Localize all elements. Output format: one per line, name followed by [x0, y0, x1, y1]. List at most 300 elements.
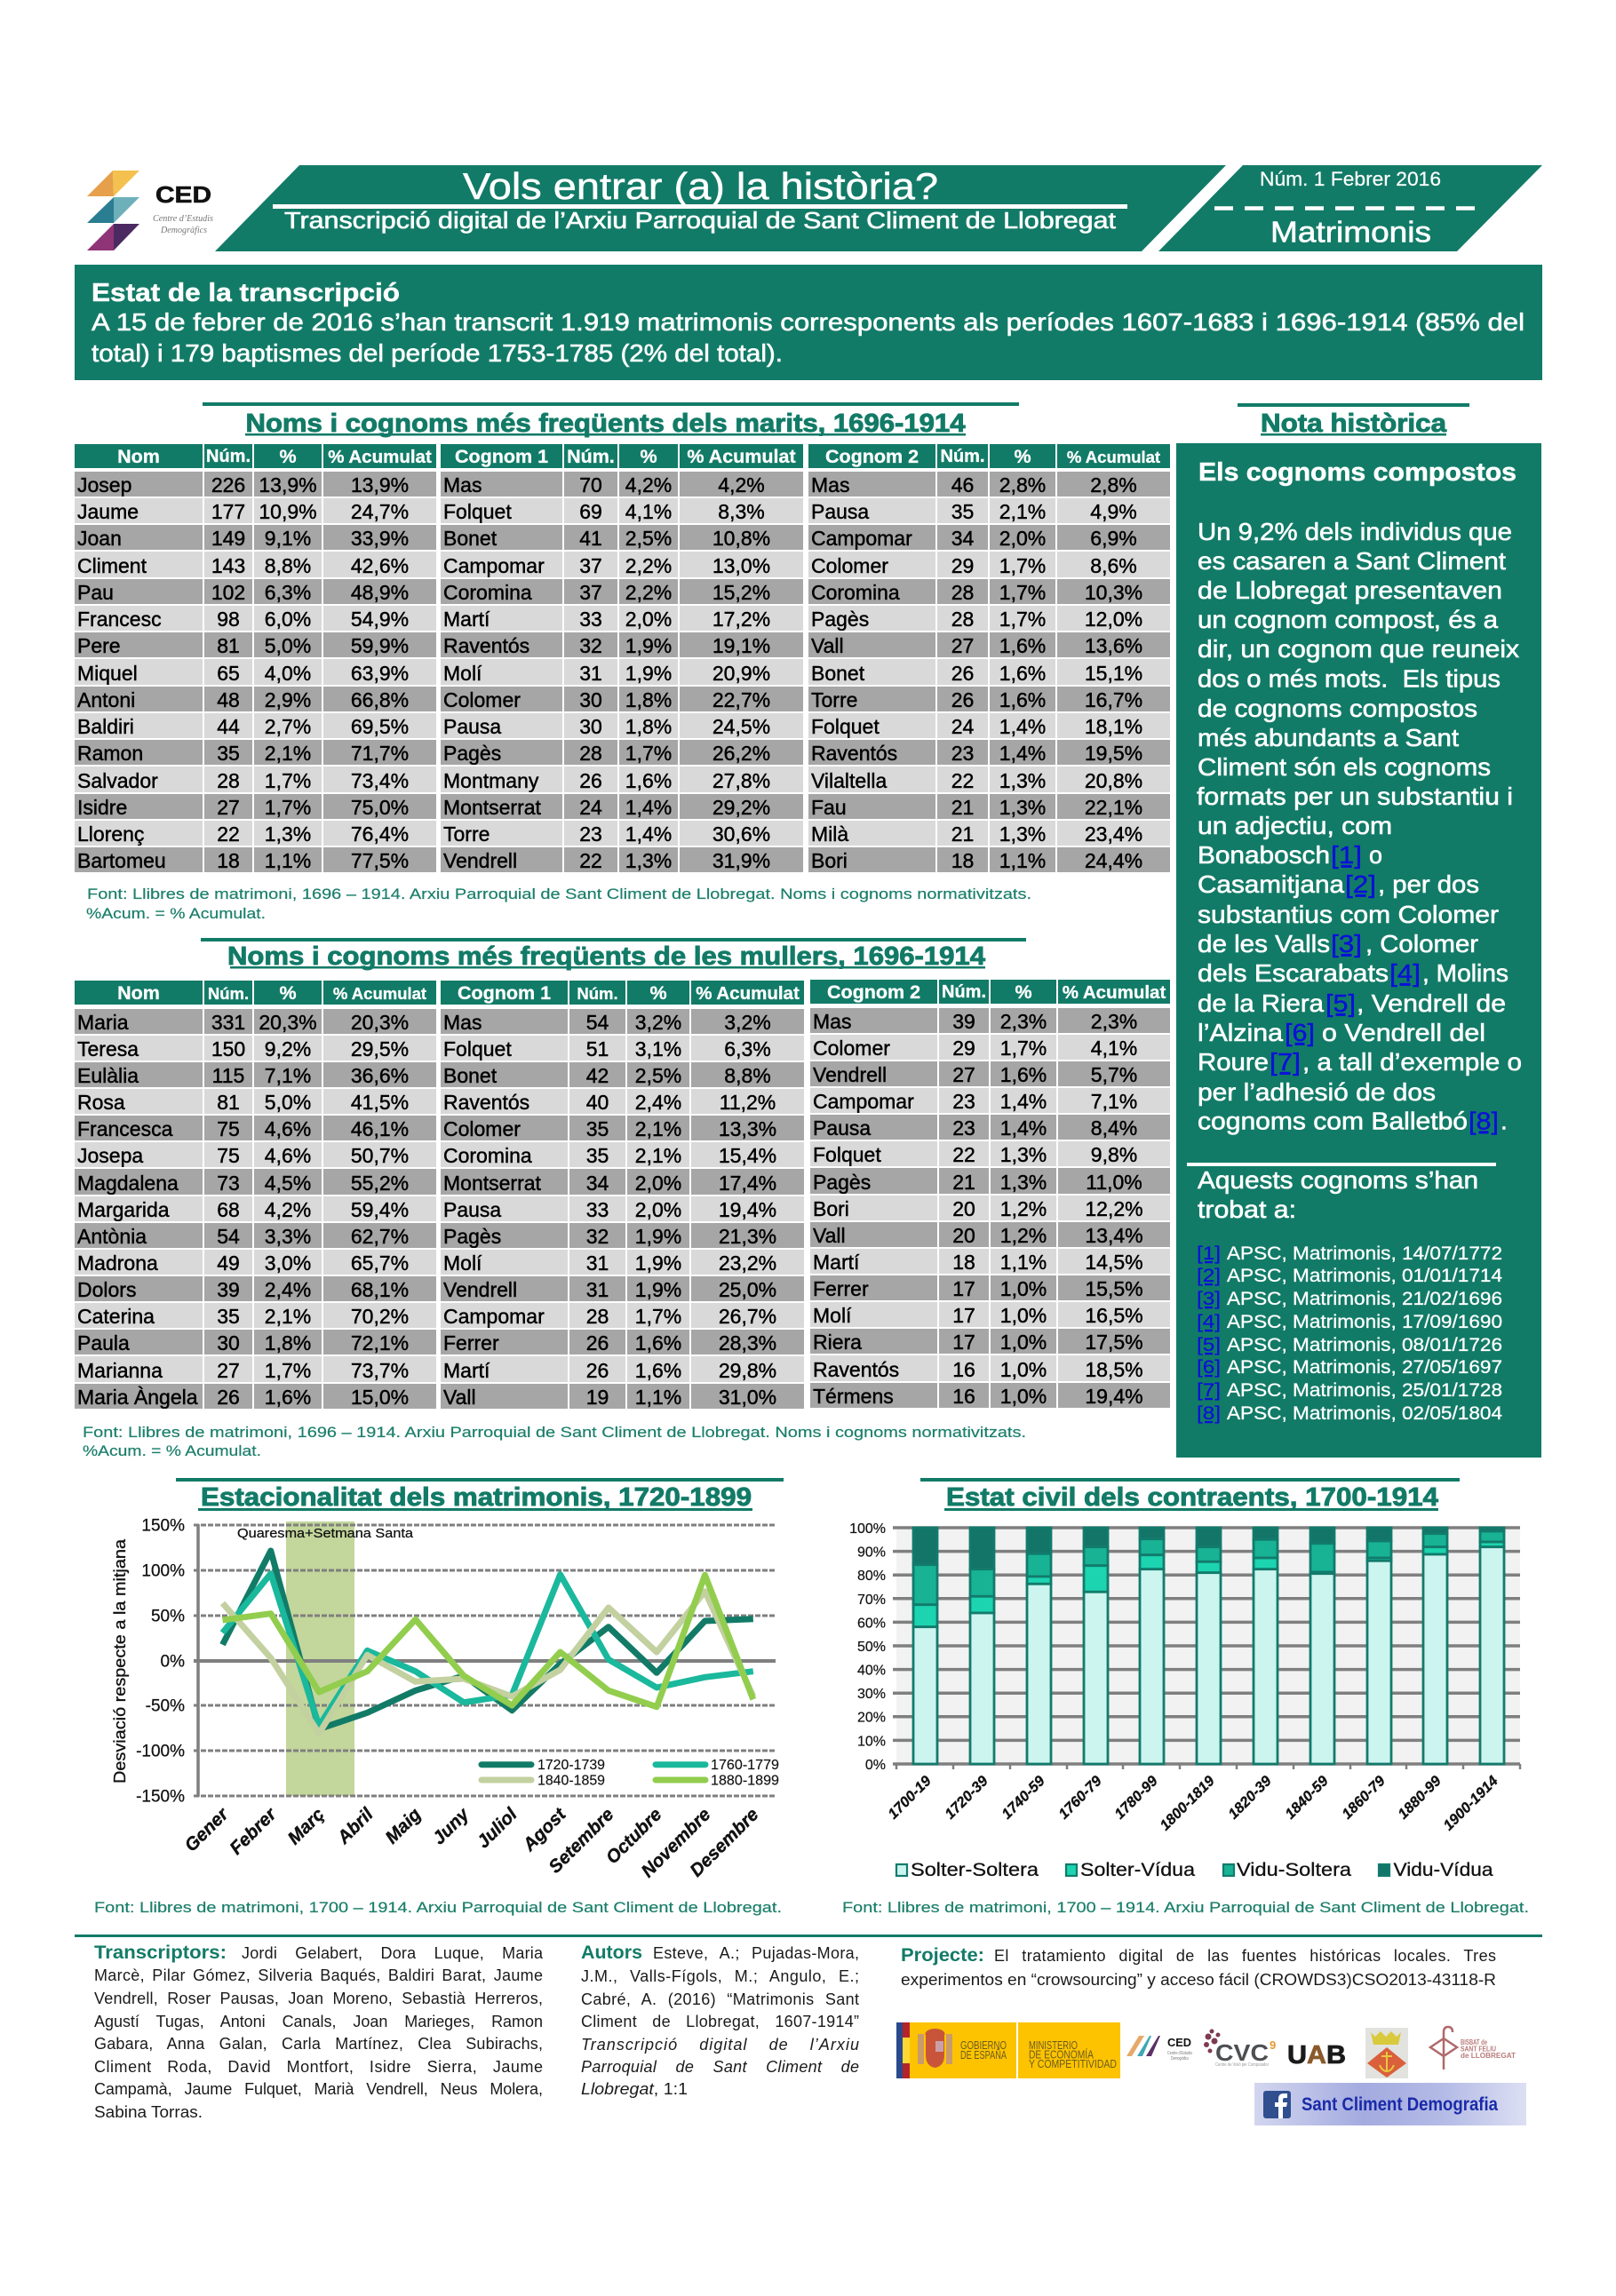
- table: cognom 2 marits: 46: [951, 473, 974, 497]
- period labels: 1800-1819: [1157, 1773, 1218, 1834]
- table: noms mullers: 26: [217, 1386, 240, 1409]
- table: cognom 1 mullers: 32: [586, 1225, 609, 1248]
- references list: [8]: [1197, 1403, 1221, 1424]
- table: cognom 2 marits: 16,7%: [1085, 688, 1142, 711]
- title banner: [215, 165, 1226, 251]
- table: noms mullers: 73: [217, 1171, 240, 1194]
- table: cognom 1 mullers: 21,3%: [719, 1225, 776, 1248]
- table: noms mullers: 9,2%: [265, 1037, 311, 1061]
- table: cognom 2 marits: 34: [951, 527, 974, 550]
- table: noms marits: 5,0%: [265, 634, 311, 657]
- table: cognom 1 marits: 4,2%: [625, 473, 672, 497]
- footer: transcriptors: Climent Roda, David Montfort, Isidre Sierra, Jaume: [94, 2058, 543, 2076]
- period labels: 1760-79: [1055, 1773, 1105, 1823]
- table: cognom 2 marits: 28: [951, 581, 974, 604]
- note body text: , a tall d’exemple o: [1302, 1048, 1522, 1076]
- table: cognom 1 mullers: 28,3%: [719, 1331, 776, 1355]
- table: noms mullers: 36,6%: [351, 1064, 409, 1087]
- table: cognom 1 mullers: 8,8%: [724, 1064, 771, 1087]
- table: cognom 2 marits: 23: [951, 742, 974, 765]
- table: noms marits: 54,9%: [351, 608, 409, 631]
- table: cognom 1 marits: 30: [579, 715, 602, 738]
- table: cognom 1 marits: Coromina: [443, 581, 532, 604]
- table: cognom 2 mullers: 14,5%: [1085, 1251, 1143, 1274]
- table: noms mullers: 39: [217, 1278, 240, 1301]
- table: cognom 2 mullers: Pausa: [813, 1116, 871, 1140]
- table: cognom 1 mullers: 1,1%: [635, 1386, 681, 1409]
- footer: autors: J.M., Valls-Fígols, M.; Angulo, E.;: [581, 1967, 859, 1985]
- table: noms mullers: Caterina: [77, 1305, 155, 1328]
- table: cognom 1 marits: 24: [579, 796, 602, 819]
- table: noms marits: 226: [211, 473, 245, 497]
- table: noms marits: Núm.: [206, 447, 251, 466]
- table: cognom 1 marits: 30: [579, 688, 602, 711]
- table: cognom 1 mullers: 2,0%: [635, 1171, 681, 1194]
- logo: bisbat: BISBAT de: [1461, 2038, 1487, 2046]
- table: noms marits: 76,4%: [351, 822, 409, 846]
- references list: [4]: [1197, 1312, 1221, 1332]
- note body text: Climent són els cognoms: [1198, 753, 1491, 781]
- table: noms marits: 75,0%: [351, 796, 409, 819]
- table: noms marits: Pere: [77, 634, 121, 657]
- table: cognom 1 mullers: 13,3%: [719, 1117, 776, 1140]
- table: noms marits: 42,6%: [351, 554, 409, 577]
- logo: gobierno de españa: DE ECONOMÍA: [1029, 2048, 1095, 2061]
- logo: CED small: [1126, 2036, 1192, 2062]
- month labels: Juliol: [473, 1803, 521, 1852]
- table: cognom 1 marits: Bonet: [443, 527, 497, 550]
- period labels: 1780-99: [1111, 1773, 1161, 1823]
- table: cognom 2 mullers: 1,2%: [1000, 1224, 1047, 1247]
- stacked bar chart: estat civil: [849, 1521, 1520, 1880]
- table: cognom 2 marits: 2,8%: [999, 473, 1046, 497]
- table: cognom 1 mullers: 2,0%: [635, 1198, 681, 1221]
- table: noms marits: 98: [217, 608, 240, 631]
- table: cognom 1 mullers: 25,0%: [719, 1278, 776, 1301]
- table: cognom 1 mullers: Mas: [443, 1011, 482, 1034]
- table: cognom 2 marits: Vilaltella: [811, 769, 887, 792]
- table: noms marits: 6,0%: [265, 608, 311, 631]
- table: cognom 1 marits: 28: [579, 742, 602, 765]
- note body text: .: [1501, 1107, 1508, 1135]
- table: cognom 1 mullers: 42: [586, 1064, 609, 1087]
- table: cognom 1 marits: 2,0%: [625, 608, 672, 631]
- table: cognom 2 marits: 19,5%: [1085, 742, 1142, 765]
- y axis labels: 50%: [857, 1640, 886, 1655]
- period labels: 1860-79: [1339, 1773, 1389, 1823]
- table: cognom 2 mullers: 1,7%: [1000, 1037, 1047, 1060]
- issue number: Núm. 1 Febrer 2016: [1260, 168, 1441, 190]
- references list: APSC, Matrimonis, 01/01/1714: [1227, 1266, 1502, 1286]
- table: cognom 2 marits: 15,1%: [1085, 661, 1142, 684]
- table: cognom 2 mullers: 8,4%: [1091, 1116, 1137, 1140]
- table: cognom 1 marits: 29,2%: [712, 796, 770, 819]
- references list: APSC, Matrimonis, 17/09/1690: [1227, 1312, 1502, 1332]
- facebook badge: [1254, 2083, 1526, 2125]
- table: cognom 1 mullers: Pausa: [443, 1198, 501, 1221]
- table: noms mullers: Margarida: [77, 1198, 170, 1221]
- table: cognom 1 mullers: Martí: [443, 1359, 490, 1382]
- table: noms marits: Baldiri: [77, 715, 134, 738]
- table: noms marits: Jaume: [77, 500, 139, 523]
- table: cognom 2 mullers: 21: [952, 1171, 975, 1194]
- table: cognom 2 mullers: 19,4%: [1085, 1385, 1143, 1408]
- table: noms marits: 24,7%: [351, 500, 409, 523]
- table: cognom 2 marits: Bonet: [811, 661, 864, 684]
- table: cognom 1 mullers: 2,4%: [635, 1091, 681, 1114]
- note body text: [4]: [1389, 959, 1421, 987]
- note body text: Un 9,2% dels individus que: [1198, 518, 1512, 545]
- table: cognom 1 marits: % Acumulat: [687, 446, 796, 467]
- subtitle: Transcripció digital de l’Arxiu Parroquial de Sant Climent de Llobregat: [284, 209, 1116, 234]
- table: cognom 1 mullers: Molí: [443, 1251, 482, 1275]
- table: noms marits: 13,9%: [259, 473, 317, 497]
- table: noms marits: 48,9%: [351, 581, 409, 604]
- table: noms mullers: 4,2%: [265, 1198, 311, 1221]
- references list: APSC, Matrimonis, 08/01/1726: [1227, 1335, 1502, 1355]
- table: cognom 1 mullers: Cognom 1: [458, 982, 551, 1004]
- table: cognom 2 marits: 21: [951, 822, 974, 846]
- table: noms mullers: Francesca: [77, 1117, 172, 1140]
- month labels: Maig: [381, 1804, 426, 1848]
- table: cognom 1 mullers: %: [649, 982, 667, 1004]
- table: cognom 1 marits: 31: [579, 661, 602, 684]
- table: cognom 2 marits: 12,0%: [1085, 608, 1142, 631]
- table: cognom 2 mullers: Pagès: [813, 1171, 871, 1194]
- table: cognom 1 marits: 69: [579, 500, 602, 523]
- y axis labels: 20%: [857, 1711, 886, 1725]
- table: cognom 2 marits: Cognom 2: [825, 446, 919, 467]
- table: cognom 2 mullers: 1,4%: [1000, 1090, 1047, 1113]
- table: cognom 2 mullers: 18: [952, 1251, 975, 1274]
- source: taula marits: %Acum. = % Acumulat.: [86, 905, 266, 922]
- month labels: Abril: [333, 1803, 378, 1848]
- table: noms marits: Pau: [77, 581, 114, 604]
- panel text: [92, 308, 1524, 367]
- table: cognom 2 mullers: 22: [952, 1143, 975, 1166]
- y axis labels: 90%: [857, 1545, 886, 1560]
- table: noms marits: 9,1%: [265, 527, 311, 550]
- table: noms mullers: 50,7%: [351, 1144, 409, 1167]
- table: noms marits: 1,3%: [265, 822, 311, 846]
- table: cognom 1 marits: Campomar: [443, 554, 545, 577]
- table: cognom 1 mullers: Folquet: [443, 1037, 512, 1061]
- table: cognom 1 marits: 17,2%: [712, 608, 770, 631]
- source: taula mullers: %Acum. = % Acumulat.: [83, 1442, 261, 1459]
- table: cognom 1 marits: Raventós: [443, 634, 529, 657]
- logo: bisbat: SANT FELIU: [1461, 2045, 1496, 2054]
- table: noms marits: 1,7%: [265, 769, 311, 792]
- table: cognom 2 marits: 1,7%: [999, 608, 1046, 631]
- table: cognom 2 marits: 1,7%: [999, 581, 1046, 604]
- table: cognom 1 mullers: 3,2%: [724, 1011, 771, 1034]
- band label: Quaresma+Setmana Santa: [237, 1526, 414, 1541]
- table: cognom 1 marits: 19,1%: [712, 634, 770, 657]
- note body text: dels Escarabats: [1198, 959, 1389, 987]
- heading: noms marits: Noms i cognoms més freqüents dels marits, 1696-1914: [245, 409, 965, 438]
- table: noms mullers: 15,0%: [351, 1386, 409, 1409]
- table: cognom 1 mullers: Pagès: [443, 1225, 501, 1248]
- period labels: 1720-39: [942, 1773, 991, 1823]
- footer: autors: Llobregat , 1:1: [581, 2080, 688, 2098]
- table: noms marits: 66,8%: [351, 688, 409, 711]
- source: taula mullers: Font: Llibres de matrimoni, 1696 – 1914. Arxiu Parroquial de Sant Climent de Llobregat. Noms i cognoms normativitzats.: [83, 1424, 1026, 1441]
- table: cognom 2 marits: 24: [951, 715, 974, 738]
- note body text: de Llobregat presentaven: [1198, 576, 1502, 604]
- table: cognom 2 mullers: Molí: [813, 1304, 851, 1327]
- table: noms marits: %: [279, 446, 297, 467]
- table: noms mullers: 73,7%: [351, 1359, 409, 1382]
- table: cognom 2 mullers: Cognom 2: [827, 981, 920, 1003]
- table: noms marits: Isidre: [77, 796, 127, 819]
- table: noms mullers: 75: [217, 1117, 240, 1140]
- note body text: , per dos: [1378, 870, 1479, 898]
- footer: autors: Autors: [581, 1942, 642, 1963]
- table: cognom 1 marits: Montserrat: [443, 796, 541, 819]
- note body text: substantius com Colomer: [1198, 901, 1499, 928]
- table: cognom 2 mullers: Raventós: [813, 1357, 899, 1380]
- table: noms marits: % Acumulat: [328, 446, 432, 467]
- table: noms marits: 177: [211, 500, 245, 523]
- table: noms mullers: Nom: [117, 982, 160, 1004]
- period labels: 1840-59: [1282, 1773, 1332, 1823]
- table: cognom 2 marits: 1,1%: [999, 849, 1046, 872]
- references list: APSC, Matrimonis, 25/01/1728: [1227, 1380, 1502, 1401]
- table: cognom 2 mullers: Riera: [813, 1331, 862, 1354]
- logo: CVC: CVC: [1215, 2039, 1269, 2066]
- table: cognom 1 marits: 41: [579, 527, 602, 550]
- table: cognom 2 marits: 1,6%: [999, 634, 1046, 657]
- table: cognom 2 marits: Vall: [811, 634, 844, 657]
- table: noms mullers: %: [279, 982, 297, 1004]
- table: cognom 2 marits: Núm.: [940, 447, 984, 466]
- table: noms mullers: Madrona: [77, 1251, 158, 1275]
- table: noms marits: 149: [211, 527, 245, 550]
- y axis labels: -50%: [146, 1696, 185, 1716]
- table: cognom 2 mullers: Vall: [813, 1224, 846, 1247]
- table: cognom 2 marits: Bori: [811, 849, 848, 872]
- y axis labels: 50%: [151, 1608, 185, 1625]
- footer: transcriptors: Sabina Torras.: [94, 2103, 203, 2121]
- table: cognom 2 marits: 20,8%: [1085, 769, 1142, 792]
- table: cognom 2 mullers: 1,0%: [1000, 1385, 1047, 1408]
- table: noms marits: 22: [217, 822, 240, 846]
- note body text: formats per un substantiu i: [1197, 783, 1513, 810]
- logo: CED small: CED: [1167, 2036, 1191, 2049]
- table: noms mullers: 115: [212, 1064, 244, 1087]
- table: cognom 2 marits: 18,1%: [1085, 715, 1142, 738]
- note body text: es casaren a Sant Climent: [1198, 547, 1506, 575]
- table: noms marits: 73,4%: [351, 769, 409, 792]
- y axis labels: [136, 1517, 185, 1807]
- table: noms mullers: 3,0%: [265, 1251, 311, 1275]
- table: cognom 1 mullers: 1,9%: [635, 1225, 681, 1248]
- table: cognom 2 marits: 22,1%: [1085, 796, 1142, 819]
- table: cognom 2 marits: Coromina: [811, 581, 900, 604]
- table: cognom 2 mullers: 23: [952, 1116, 975, 1140]
- logo: gobierno de españa: Y COMPETITIVIDAD: [1029, 2058, 1117, 2070]
- table: cognom 1 marits: 15,2%: [712, 581, 770, 604]
- table: cognom 1 mullers: 51: [586, 1037, 609, 1061]
- table: cognom 1 marits: 22: [579, 849, 602, 872]
- table: noms mullers: 2,4%: [265, 1278, 311, 1301]
- table: noms mullers: 30: [217, 1331, 240, 1355]
- legend: [896, 1860, 1493, 1880]
- bar 1840-59: [1310, 1528, 1334, 1764]
- bar 1880-99: [1423, 1528, 1447, 1764]
- table: cognom 2 mullers: [810, 980, 1170, 1408]
- references list: [2]: [1197, 1266, 1221, 1286]
- table: noms marits: Ramon: [77, 742, 143, 765]
- legend: Vidu-Vídua: [1393, 1860, 1493, 1880]
- table: noms marits: 69,5%: [351, 715, 409, 738]
- footer: autors: Climent de Llobregat, 1607-1914”: [581, 2013, 859, 2030]
- table: cognom 1 mullers: % Acumulat: [696, 982, 800, 1004]
- table: cognom 2 mullers: 5,7%: [1091, 1063, 1137, 1086]
- table: noms marits: Antoni: [77, 688, 135, 711]
- table: cognom 1 marits: Núm.: [567, 446, 615, 467]
- table: cognom 1 marits: 1,4%: [625, 822, 672, 846]
- y axis labels: 0%: [865, 1758, 886, 1773]
- table: cognom 2 mullers: 1,3%: [1000, 1171, 1047, 1194]
- logo: CVC: 9: [1270, 2038, 1276, 2052]
- table: cognom 2 mullers: 1,0%: [1000, 1277, 1047, 1300]
- table: cognom 1 mullers: 17,4%: [719, 1171, 776, 1194]
- tables: marits: [75, 444, 1170, 872]
- table: cognom 2 marits: [808, 444, 1170, 872]
- note body text: cognoms com Balletbó: [1198, 1107, 1468, 1135]
- table: cognom 1 mullers: 34: [586, 1171, 609, 1194]
- source: taula marits: [86, 886, 1031, 922]
- table: noms mullers: Rosa: [77, 1091, 125, 1114]
- logo: CED: [87, 171, 213, 250]
- table: noms mullers: Maria Àngela: [77, 1386, 198, 1409]
- month labels: Març: [283, 1804, 329, 1848]
- month labels: Novembre: [637, 1804, 715, 1881]
- table: cognom 1 mullers: 3,2%: [635, 1011, 681, 1034]
- table: cognom 1 mullers: 1,9%: [635, 1251, 681, 1275]
- references heading: Aquests cognoms s’han: [1198, 1166, 1478, 1194]
- table: cognom 2 marits: 28: [951, 608, 974, 631]
- table: noms marits: 102: [211, 581, 245, 604]
- table: cognom 2 mullers: 29: [952, 1037, 975, 1060]
- table: noms mullers: Josepa: [77, 1144, 143, 1167]
- note body text: , Molins: [1422, 959, 1509, 987]
- table: cognom 1 mullers: 2,5%: [635, 1064, 681, 1087]
- heading: estacionalitat: Estacionalitat dels matrimonis, 1720-1899: [201, 1483, 752, 1512]
- note body text: [8]: [1469, 1107, 1499, 1135]
- note body text: [6]: [1285, 1019, 1315, 1046]
- table: cognom 1 mullers: 1,9%: [635, 1278, 681, 1301]
- table: cognom 2 marits: 29: [951, 554, 974, 577]
- table: cognom 2 marits: 1,3%: [999, 796, 1046, 819]
- logo: CED small: Centre d’Estudis: [1167, 2051, 1192, 2056]
- note body text: més abundants a Sant: [1198, 724, 1459, 751]
- table: cognom 2 marits: 10,3%: [1085, 581, 1142, 604]
- table: cognom 2 mullers: 23: [952, 1090, 975, 1113]
- references list: [5]: [1197, 1335, 1221, 1355]
- heading: noms marits: [203, 402, 1019, 438]
- table: cognom 1 mullers: 15,4%: [719, 1144, 776, 1167]
- table: cognom 1 mullers: 11,2%: [720, 1091, 776, 1114]
- panel text: A 15 de febrer de 2016 s’han transcrit 1.919 matrimonis corresponents als períodes 1607-1683 i 1696-1914 (85% del: [92, 308, 1524, 336]
- logo: CED: Centre d’Estudis: [153, 213, 213, 224]
- line chart: estacionalitat: [110, 1517, 779, 1881]
- note body text: , Colomer: [1365, 930, 1478, 957]
- period labels: 1700-19: [885, 1773, 935, 1823]
- footer: transcriptors: Marcè, Pilar Gómez, Silveria Baqués, Baldiri Barat, Jaume: [94, 1966, 543, 1984]
- bar 1700-19: [913, 1528, 937, 1764]
- table: cognom 2 mullers: 17: [952, 1304, 975, 1327]
- table: noms marits: 6,3%: [265, 581, 311, 604]
- table: noms marits: 44: [217, 715, 240, 738]
- table: cognom 2 mullers: Bori: [813, 1197, 849, 1220]
- table: cognom 1 mullers: 35: [586, 1144, 609, 1167]
- footer: projecte: [901, 1945, 1496, 1989]
- table: noms marits: 28: [217, 769, 240, 792]
- bar 1760-79: [1084, 1528, 1108, 1764]
- table: noms marits: 1,7%: [265, 796, 311, 819]
- tables: mullers: [75, 980, 1170, 1409]
- table: noms mullers: [75, 981, 436, 1409]
- legend: Solter-Soltera: [911, 1860, 1039, 1880]
- table: cognom 1 marits: 30,6%: [712, 822, 770, 846]
- note body text: [5]: [1325, 989, 1356, 1017]
- table: cognom 2 mullers: 11,0%: [1086, 1171, 1142, 1194]
- table: cognom 1 mullers: 26,7%: [719, 1305, 776, 1328]
- table: noms mullers: Dolors: [77, 1278, 136, 1301]
- table: cognom 1 mullers: Coromina: [443, 1144, 532, 1167]
- footer: transcriptors: Vendrell, Roser Pausas, Joan Moreno, Sebastià Herreros,: [94, 1990, 543, 2007]
- table: cognom 2 marits: 4,9%: [1090, 500, 1137, 523]
- logo: CVC: Centre de Visió per Computador: [1215, 2062, 1269, 2068]
- table: cognom 1 marits: 2,5%: [625, 527, 672, 550]
- footer: transcriptors: Campamà, Jaume Fulquet, Marià Vendrell, Neus Molera,: [94, 2080, 543, 2098]
- table: cognom 2 marits: 1,3%: [999, 822, 1046, 846]
- table: noms mullers: 72,1%: [351, 1331, 409, 1355]
- table: noms mullers: 1,6%: [265, 1386, 311, 1409]
- table: noms mullers: 4,6%: [265, 1117, 311, 1140]
- panel heading: Els cognoms compostos: [1198, 458, 1516, 487]
- table: cognom 1 marits: 1,3%: [625, 849, 672, 872]
- table: cognom 2 mullers: 2,3%: [1000, 1010, 1047, 1033]
- table: noms mullers: 49: [217, 1251, 240, 1275]
- table: cognom 1 marits: 26: [579, 769, 602, 792]
- table: cognom 2 mullers: 17: [952, 1277, 975, 1300]
- month labels: Setembre: [545, 1804, 618, 1878]
- table: cognom 2 mullers: % Acumulat: [1063, 982, 1166, 1002]
- table: cognom 1 marits: 37: [579, 581, 602, 604]
- series 1720-1739: [222, 1551, 753, 1729]
- table: cognom 1 marits: Mas: [443, 473, 482, 497]
- panel text: total) i 179 baptismes del període 1753-1785 (2% del total).: [92, 339, 783, 367]
- table: cognom 2 marits: 18: [951, 849, 974, 872]
- table: cognom 2 marits: Milà: [811, 822, 848, 846]
- facebook badge: Sant Climent Demografia: [1302, 2094, 1498, 2115]
- table: cognom 1 marits: 23: [579, 822, 602, 846]
- table: noms marits: Nom: [117, 446, 160, 467]
- table: cognom 1 marits: Martí: [443, 608, 490, 631]
- table: noms mullers: 75: [217, 1144, 240, 1167]
- table: cognom 2 mullers: Núm.: [942, 982, 986, 1002]
- table: cognom 2 mullers: 1,0%: [1000, 1304, 1047, 1327]
- table: cognom 2 mullers: 1,2%: [1000, 1197, 1047, 1220]
- table: cognom 1 marits: Pausa: [443, 715, 501, 738]
- table: cognom 2 marits: 2,8%: [1090, 473, 1137, 497]
- table: cognom 1 mullers: [441, 981, 804, 1409]
- y axis labels: 70%: [857, 1593, 886, 1608]
- table: cognom 2 mullers: 27: [952, 1063, 975, 1086]
